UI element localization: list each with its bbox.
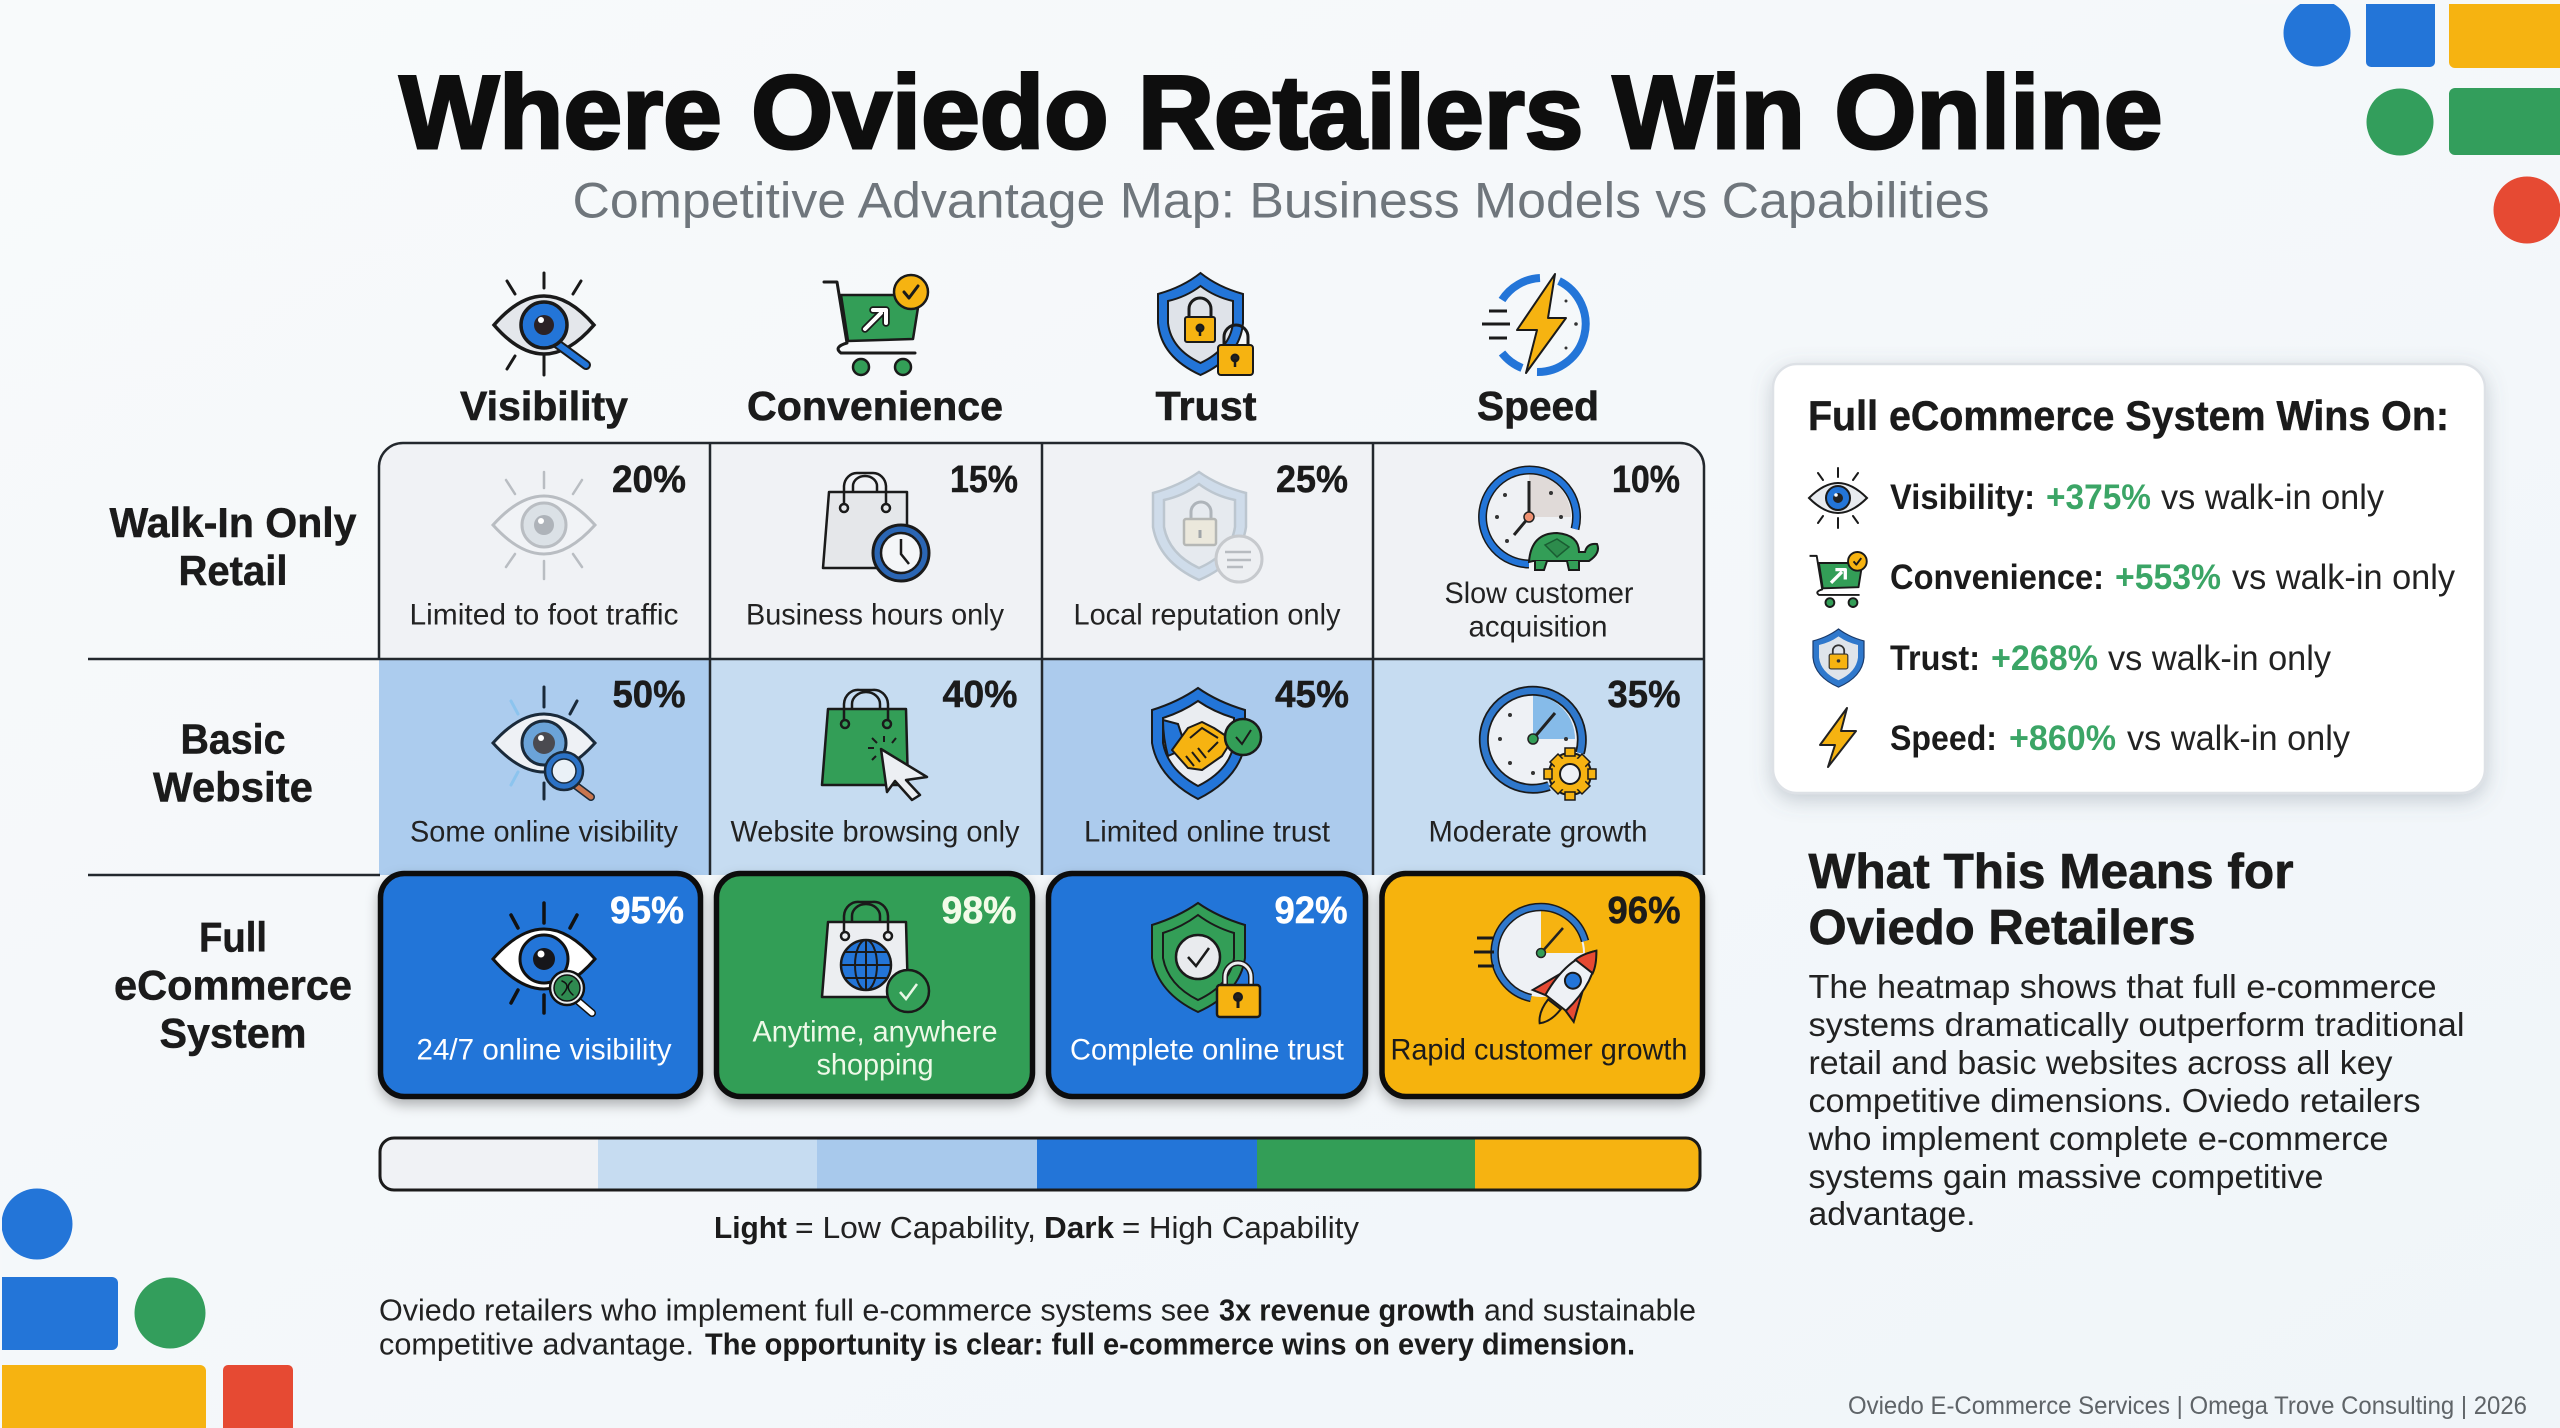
cell: walk-in speed: 10% [1612, 459, 1680, 501]
row 2: basic website cells [379, 659, 1704, 875]
legend caption [714, 1210, 1359, 1245]
cell: website visibility: 50% [612, 674, 686, 716]
text block: explanation: advantage. [1808, 1195, 1976, 1232]
conclusion text [379, 1292, 1696, 1362]
row: trust stat [1813, 629, 2331, 687]
card: full trust: Complete online trust [1070, 1034, 1345, 1066]
cell: walk-in visibility: 20% [612, 459, 686, 501]
cell: website trust [1042, 659, 1373, 875]
column heading: Trust [1156, 273, 1257, 429]
row: visibility stat [1809, 468, 2384, 528]
card: full speed: 96% [1608, 890, 1680, 932]
column heading: Speed: Speed [1477, 383, 1599, 429]
icon: faded shield with badge [1153, 472, 1262, 582]
cell: walk-in speed: Slow customer [1444, 577, 1634, 610]
row: speed stat [1820, 708, 2350, 767]
column heading: Visibility: Visibility [460, 383, 628, 429]
cell: walk-in visibility [379, 443, 710, 659]
row: convenience stat: vs walk-in only [2232, 558, 2455, 597]
conclusion text: The opportunity is clear: full e-commerce wins on every dimension. [705, 1326, 1635, 1362]
row heading: Walk-In Only Retail [110, 499, 357, 594]
row: convenience stat [1810, 552, 2455, 607]
cell: website convenience: Website browsing only [730, 816, 1020, 848]
text block: explanation: competitive dimensions. Oviedo retailers [1808, 1082, 2420, 1119]
column heading: Visibility [460, 273, 628, 429]
card: full visibility [380, 874, 700, 1096]
row heading: Full eCommerce System: Full [199, 914, 267, 960]
row: speed stat: Speed: [1890, 719, 1997, 758]
heading: what this means [1808, 845, 2294, 955]
text block: explanation: The heatmap shows that full e-commerce [1808, 968, 2436, 1005]
column heading: Convenience: Convenience [747, 383, 1003, 429]
cell: walk-in convenience: Business hours only [746, 598, 1004, 632]
heading: what this means: Oviedo Retailers [1808, 901, 2196, 955]
icon: small cart [1810, 552, 1867, 607]
cell: website convenience [710, 659, 1042, 875]
icon: small eye [1809, 468, 1867, 528]
card: full speed [1382, 874, 1702, 1096]
row heading: Full eCommerce System [114, 914, 352, 1056]
column heading: Trust: Trust [1156, 383, 1257, 429]
footer credit: Oviedo E-Commerce Services | Omega Trove Consulting | 2026 [1848, 1392, 2527, 1420]
row: convenience stat: Convenience: [1890, 558, 2104, 597]
cell: website speed: 35% [1608, 674, 1680, 716]
cell: walk-in convenience: 15% [950, 459, 1018, 501]
card: full visibility: 24/7 online visibility [416, 1034, 672, 1066]
text block: explanation [1807, 968, 2464, 1232]
cell: website visibility [379, 659, 710, 875]
icon: green bag with cursor [822, 690, 927, 800]
text block: explanation: systems gain massive competitive [1808, 1158, 2324, 1195]
panel heading: Full eCommerce System Wins On: [1808, 392, 2449, 439]
icon: faded eye [493, 472, 595, 579]
cell: walk-in trust: Local reputation only [1074, 598, 1340, 632]
row: trust stat: Trust: [1890, 639, 1980, 678]
row 1: walk-in cells [379, 443, 1704, 659]
subtitle: Competitive Advantage Map: Business Models vs Capabilities [572, 172, 1990, 228]
heatmap table [88, 364, 2527, 1420]
legend caption: Light [714, 1210, 787, 1245]
card: full trust [1048, 874, 1366, 1096]
icon: green shield with lock [1152, 903, 1260, 1017]
card: full visibility: 95% [610, 890, 684, 932]
row heading: Basic Website: Website [153, 764, 313, 810]
icon: small shield [1813, 629, 1864, 687]
cell: walk-in speed: acquisition [1468, 610, 1608, 644]
row 3: full ecommerce cards [380, 874, 1702, 1096]
cell: walk-in visibility: Limited to foot traffic [410, 598, 678, 632]
text block: explanation: retail and basic websites across all key [1808, 1044, 2393, 1081]
cell: website speed: Moderate growth [1428, 816, 1648, 848]
row: visibility stat: +375% [2046, 478, 2151, 517]
card: full trust: 92% [1274, 890, 1348, 932]
row: visibility stat: Visibility: [1890, 478, 2035, 517]
icon: clock with gear [1484, 691, 1596, 800]
card: full convenience [716, 874, 1032, 1096]
cell: walk-in trust: 25% [1276, 459, 1348, 501]
conclusion text: Oviedo retailers who implement full e-commerce systems see [379, 1292, 1210, 1328]
panel: wins summary [1773, 364, 2485, 793]
row heading: Walk-In Only Retail: Retail [178, 547, 288, 594]
row heading: Full eCommerce System: eCommerce [114, 962, 352, 1008]
row heading: Basic Website: Basic [180, 716, 286, 762]
row: speed stat: +860% [2009, 719, 2116, 758]
icon: eye with magnifier, dark [493, 903, 595, 1013]
row heading: Full eCommerce System: System [160, 1010, 306, 1056]
column heading: Convenience [747, 275, 1003, 429]
legend caption: = Low Capability, [795, 1210, 1036, 1245]
legend caption: = High Capability [1122, 1210, 1359, 1245]
icon: shield with locks [1158, 273, 1253, 375]
icon: shopping cart [824, 275, 928, 375]
card: full convenience: shopping [816, 1048, 934, 1082]
icon: small lightning bolt [1820, 708, 1856, 767]
row: convenience stat: +553% [2115, 558, 2221, 597]
cell: website speed [1373, 659, 1704, 875]
legend caption: Dark [1044, 1210, 1115, 1245]
card: full convenience: Anytime, anywhere [752, 1016, 998, 1048]
conclusion text: competitive advantage. [379, 1326, 694, 1362]
text block: explanation: who implement complete e-commerce [1807, 1120, 2388, 1157]
column heading: Speed [1477, 274, 1599, 429]
card: full convenience: 98% [942, 890, 1016, 932]
icon: bag with globe [822, 902, 929, 1012]
icon: shopping bag with clock [823, 473, 929, 581]
card: full speed: Rapid customer growth [1390, 1034, 1688, 1066]
cell: website convenience: 40% [942, 674, 1018, 716]
conclusion text: and sustainable [1484, 1292, 1696, 1328]
row heading: Walk-In Only Retail: Walk-In Only [110, 499, 357, 546]
cell: website visibility: Some online visibility [410, 816, 678, 848]
row heading: Basic Website [153, 716, 313, 810]
heading: what this means: What This Means for [1808, 845, 2294, 899]
cell: website trust: Limited online trust [1084, 816, 1331, 848]
icon: clock with turtle [1483, 470, 1598, 570]
cell: website trust: 45% [1275, 674, 1349, 716]
row: visibility stat: vs walk-in only [2161, 478, 2384, 517]
cell: walk-in trust [1042, 443, 1373, 659]
legend gradient bar [380, 1138, 1700, 1190]
cell: walk-in convenience [710, 443, 1042, 659]
table grid lines [88, 443, 1704, 875]
cell: walk-in speed [1373, 443, 1704, 659]
title: Where Oviedo Retailers Win Online [400, 55, 2162, 171]
text block: explanation: systems dramatically outperform traditional [1808, 1006, 2464, 1043]
decorative shapes: bottom left [0, 1188, 293, 1428]
icon: clock with rocket [1474, 907, 1617, 1039]
icon: clock with lightning bolt [1482, 274, 1586, 373]
row: speed stat: vs walk-in only [2127, 719, 2350, 758]
decorative shapes: top right [2240, 0, 2560, 244]
conclusion text: 3x revenue growth [1219, 1292, 1475, 1328]
icon: eye with magnifier [494, 273, 594, 375]
icon: shield with handshake [1152, 688, 1261, 799]
row: trust stat: vs walk-in only [2108, 639, 2331, 678]
row: trust stat: +268% [1991, 639, 2098, 678]
icon: eye with magnifier, light [493, 687, 595, 799]
